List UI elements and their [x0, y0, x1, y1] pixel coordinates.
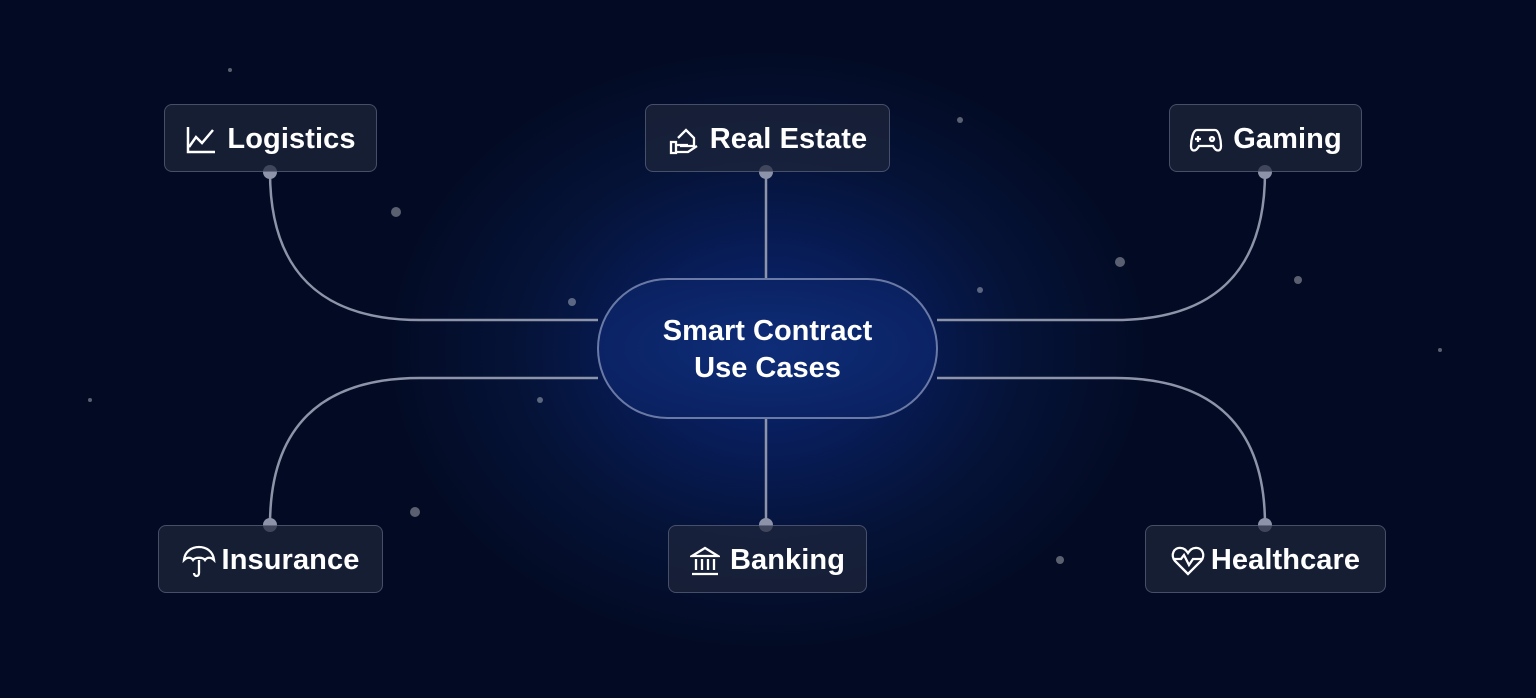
- icon: chart: [186, 127, 215, 154]
- center node: Smart Contract: [663, 315, 872, 347]
- icon: umbrella: [182, 546, 216, 578]
- box: Logistics: [164, 104, 377, 172]
- box: Real Estate: Real Estate: [710, 123, 867, 155]
- center node: Use Cases: [694, 352, 841, 384]
- box: Healthcare: [1145, 525, 1386, 593]
- box: Banking: Banking: [730, 544, 845, 576]
- box: Logistics: Logistics: [227, 123, 356, 155]
- box: Real Estate: [645, 104, 890, 172]
- box: Insurance: [158, 525, 383, 593]
- icon: heart pulse: [1172, 546, 1204, 576]
- center node: [597, 278, 938, 419]
- box: Healthcare: Healthcare: [1211, 544, 1360, 576]
- box: Gaming: Gaming: [1233, 123, 1342, 155]
- icon: bank: [690, 546, 720, 576]
- box: Insurance: Insurance: [222, 544, 359, 576]
- box: Gaming: [1169, 104, 1362, 172]
- icon: house in hand: [670, 128, 698, 154]
- box: Banking: [668, 525, 867, 593]
- icon: gamepad: [1190, 128, 1222, 152]
